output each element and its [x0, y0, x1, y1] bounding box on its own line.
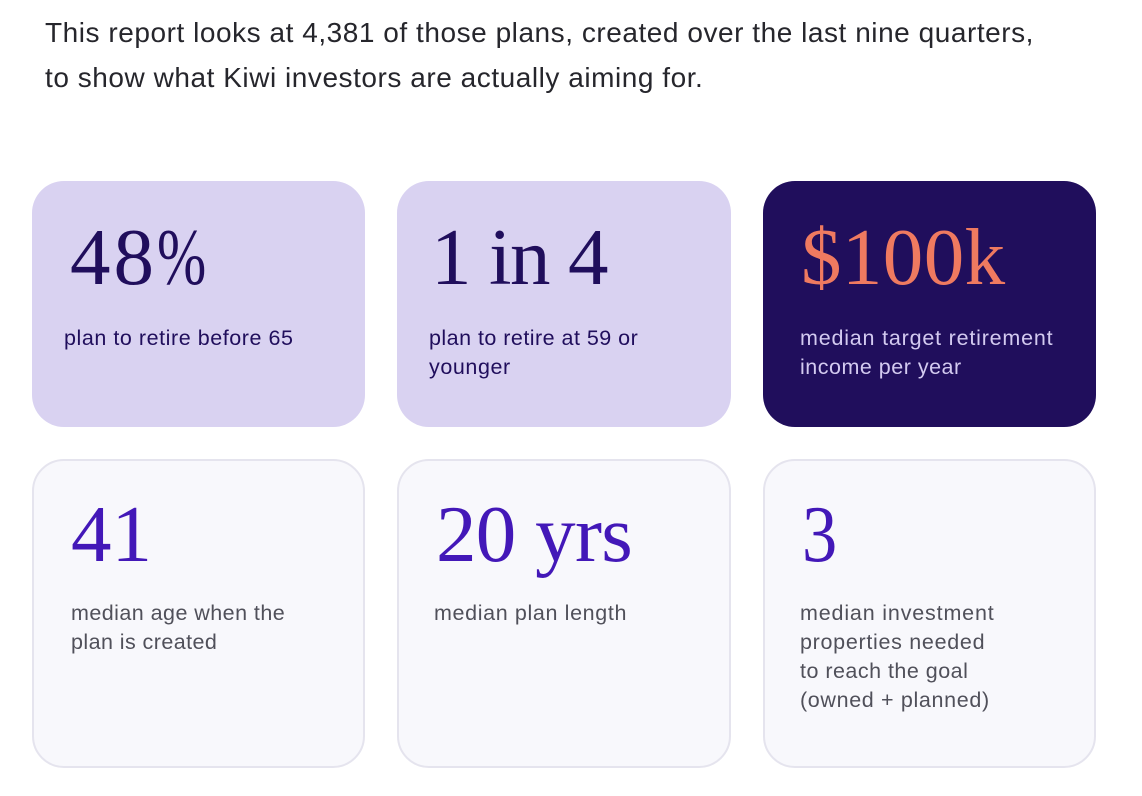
label: retire at 59 or younger: younger: [429, 355, 511, 379]
intro text: This report looks at 4,381 of those plans, created over the last nine quarters,: [45, 17, 1034, 48]
label: median target retirement income: [800, 326, 1053, 379]
label: retire at 59 or younger: [429, 326, 638, 379]
panel: 20 yrs: [397, 459, 731, 768]
panel: 3: [763, 459, 1096, 768]
label: median plan length: median plan length: [434, 601, 627, 625]
label: median target retirement income: median target retirement: [800, 326, 1053, 350]
intro text: [45, 17, 1034, 93]
label: median investment properties: to reach the goal: [800, 659, 968, 683]
label: median investment properties: properties needed: [800, 630, 985, 654]
stat: 48%: %: [157, 212, 208, 302]
label: median investment properties: (owned + planned): [800, 688, 990, 712]
label: median target retirement income: income per year: [800, 355, 962, 379]
stat: 48%: [70, 212, 208, 302]
label: median investment properties: [800, 601, 995, 712]
stat: 20 yrs: 20 yrs: [436, 489, 632, 579]
label: median age: [71, 601, 285, 654]
panel: 41: [32, 459, 365, 768]
panel: $100k: [763, 181, 1096, 427]
label: retire at 59 or younger: plan to retire at 59 or: [429, 326, 638, 350]
panel: 1 in 4: [397, 181, 731, 427]
panel: 48% plan to retire before 65: [32, 181, 365, 427]
label: median investment properties: median investment: [800, 601, 995, 625]
label: median age: median age when the: [71, 601, 285, 625]
stat: 48%: 48: [70, 212, 157, 302]
label: retire before 65: plan to retire before 65: [64, 326, 294, 350]
stat: 41: 41: [71, 489, 152, 579]
stat: $100k: $100k: [801, 212, 1006, 302]
stat: 3: 3: [802, 489, 837, 579]
label: median age: plan is created: [71, 630, 217, 654]
stat: 1 in 4: 1 in 4: [431, 212, 607, 302]
intro text: to show what Kiwi investors are actually aiming for.: [45, 62, 703, 93]
